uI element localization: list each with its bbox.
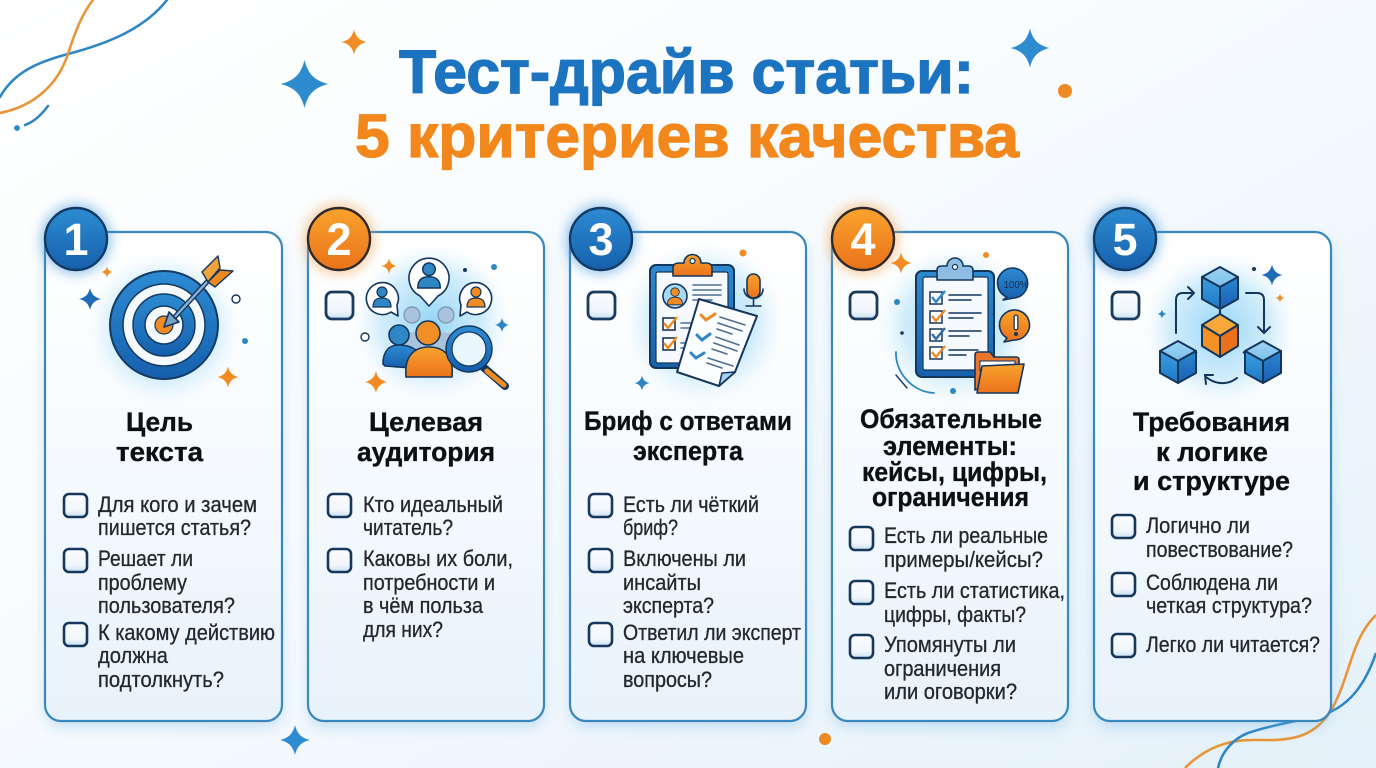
item 2.2: в чём польза (363, 593, 484, 618)
heading 5: Требования (1133, 407, 1290, 437)
item 1.3: подтолкнуть? (98, 667, 224, 692)
item 1.2 (64, 546, 235, 618)
item 4.2: цифры, факты? (884, 602, 1026, 627)
heading 1 (116, 407, 204, 467)
item 1.2: пользователя? (98, 593, 235, 618)
item 2.1: читатель? (363, 515, 453, 540)
icon: cubes structure (1144, 252, 1296, 404)
panel: criterion 1 (41, 204, 282, 727)
sparkle: orange above title (342, 30, 366, 54)
heading 5 (1133, 407, 1290, 496)
heading 1: текста (116, 437, 204, 467)
icon: target with arrow (79, 252, 248, 404)
badge 5 (1090, 204, 1160, 274)
card frame 1 (45, 232, 282, 721)
item 4.3: или оговорки? (884, 679, 1017, 704)
decorative curves top left (0, 0, 167, 130)
item 4.2 (850, 578, 1065, 627)
title line 1: Тест-драйв статьи: (399, 38, 974, 106)
item 3.3: вопросы? (623, 667, 712, 692)
heading 3 (584, 406, 792, 466)
item 3.3: Ответил ли эксперт (623, 620, 801, 645)
item 1.2: Решает ли (98, 546, 193, 571)
item 5.1 (1112, 513, 1293, 562)
item 2.2: потребности и (363, 570, 495, 595)
sparkle: blue right of title (1010, 28, 1050, 68)
item 1.2: проблему (98, 570, 187, 595)
icon: clipboard with brief (624, 242, 784, 402)
item 3.2 (589, 546, 746, 618)
header checkbox 5 (1112, 292, 1139, 319)
heading 2: аудитория (357, 437, 495, 467)
item 3.1: бриф? (623, 515, 678, 540)
item 1.1 (64, 492, 257, 540)
heading 2: Целевая (369, 407, 483, 437)
item 4.1 (850, 523, 1048, 572)
badge 2: 2 (326, 214, 352, 265)
item 3.1 (589, 492, 759, 540)
item 5.2: четкая структура? (1146, 593, 1312, 618)
item 5.3: Легко ли читается? (1146, 632, 1320, 657)
card frame 2 (308, 232, 544, 721)
heading 3: эксперта (633, 436, 744, 466)
heading 4: кейсы, цифры, (862, 457, 1047, 487)
item 1.3: К какому действию (98, 620, 275, 645)
panel: criterion 3 (566, 204, 806, 727)
heading 4 (860, 404, 1047, 512)
item 4.3: ограничения (884, 656, 1001, 681)
item 4.3: Упомянуты ли (884, 632, 1016, 657)
badge 3 (566, 204, 636, 274)
badge 4: 4 (850, 214, 876, 265)
heading 5: и структуре (1133, 466, 1290, 496)
dot: orange right of title (1058, 84, 1072, 98)
icon: checklist with folder (877, 247, 1033, 403)
item 3.2: инсайты (623, 570, 701, 595)
card frame 4 (832, 232, 1068, 721)
item 2.1 (328, 492, 503, 540)
panel: criterion 5 (1090, 204, 1331, 727)
heading 4: элементы: (883, 431, 1017, 461)
sparkle: blue bottom (280, 725, 310, 755)
item 1.1: пишется статья? (98, 515, 251, 540)
item 1.3 (64, 620, 275, 692)
header checkbox 3 (588, 292, 615, 319)
item 5.1: повествование? (1146, 537, 1293, 562)
dot: orange bottom (819, 733, 831, 745)
badge 3: 3 (588, 214, 614, 265)
item 1.1: Для кого и зачем (98, 492, 257, 517)
item 1.3: должна (98, 643, 169, 668)
item 2.2: для них? (363, 617, 443, 642)
badge 1 (41, 204, 111, 274)
badge 5: 5 (1112, 214, 1138, 265)
card frame 5 (1094, 232, 1331, 721)
badge 4 (828, 204, 898, 274)
heading 2 (357, 407, 495, 467)
item 3.2: Включены ли (623, 546, 746, 571)
item 2.2: Каковы их боли, (363, 546, 513, 571)
sparkle: blue left of title (280, 60, 328, 108)
title (355, 38, 1020, 170)
card frame 3 (570, 232, 806, 721)
heading 4: ограничения (872, 482, 1029, 512)
item 5.1: Логично ли (1146, 513, 1250, 538)
heading 5: к логике (1156, 437, 1268, 467)
decorative curves bottom right (1185, 615, 1376, 768)
item 5.2: Соблюдена ли (1146, 570, 1278, 595)
heading 1: Цель (126, 407, 193, 437)
item 3.2: эксперта? (623, 593, 714, 618)
item 3.1: Есть ли чёткий (623, 492, 759, 517)
heading 4: Обязательные (860, 404, 1042, 434)
item 4.3 (850, 632, 1017, 704)
panel: criterion 4 (828, 204, 1068, 727)
item 3.3 (589, 620, 801, 692)
badge 2 (304, 204, 374, 274)
icon: audience with magnifier (354, 244, 510, 400)
item 5.2 (1112, 570, 1312, 618)
header checkbox 2 (326, 292, 353, 319)
panel: criterion 2 (304, 204, 544, 727)
item 4.2: Есть ли статистика, (884, 578, 1065, 603)
item 2.2 (328, 546, 513, 642)
item 2.1: Кто идеальный (363, 492, 503, 517)
heading 3: Бриф с ответами (584, 406, 792, 436)
item 4.1: Есть ли реальные (884, 523, 1048, 548)
title line 2: 5 критериев качества (355, 102, 1020, 170)
icon: checklist with folder: 100% (1004, 280, 1029, 291)
header checkbox 4 (850, 292, 877, 319)
badge 1: 1 (63, 214, 89, 265)
item 4.1: примеры/кейсы? (884, 547, 1043, 572)
item 3.3: на ключевые (623, 643, 744, 668)
